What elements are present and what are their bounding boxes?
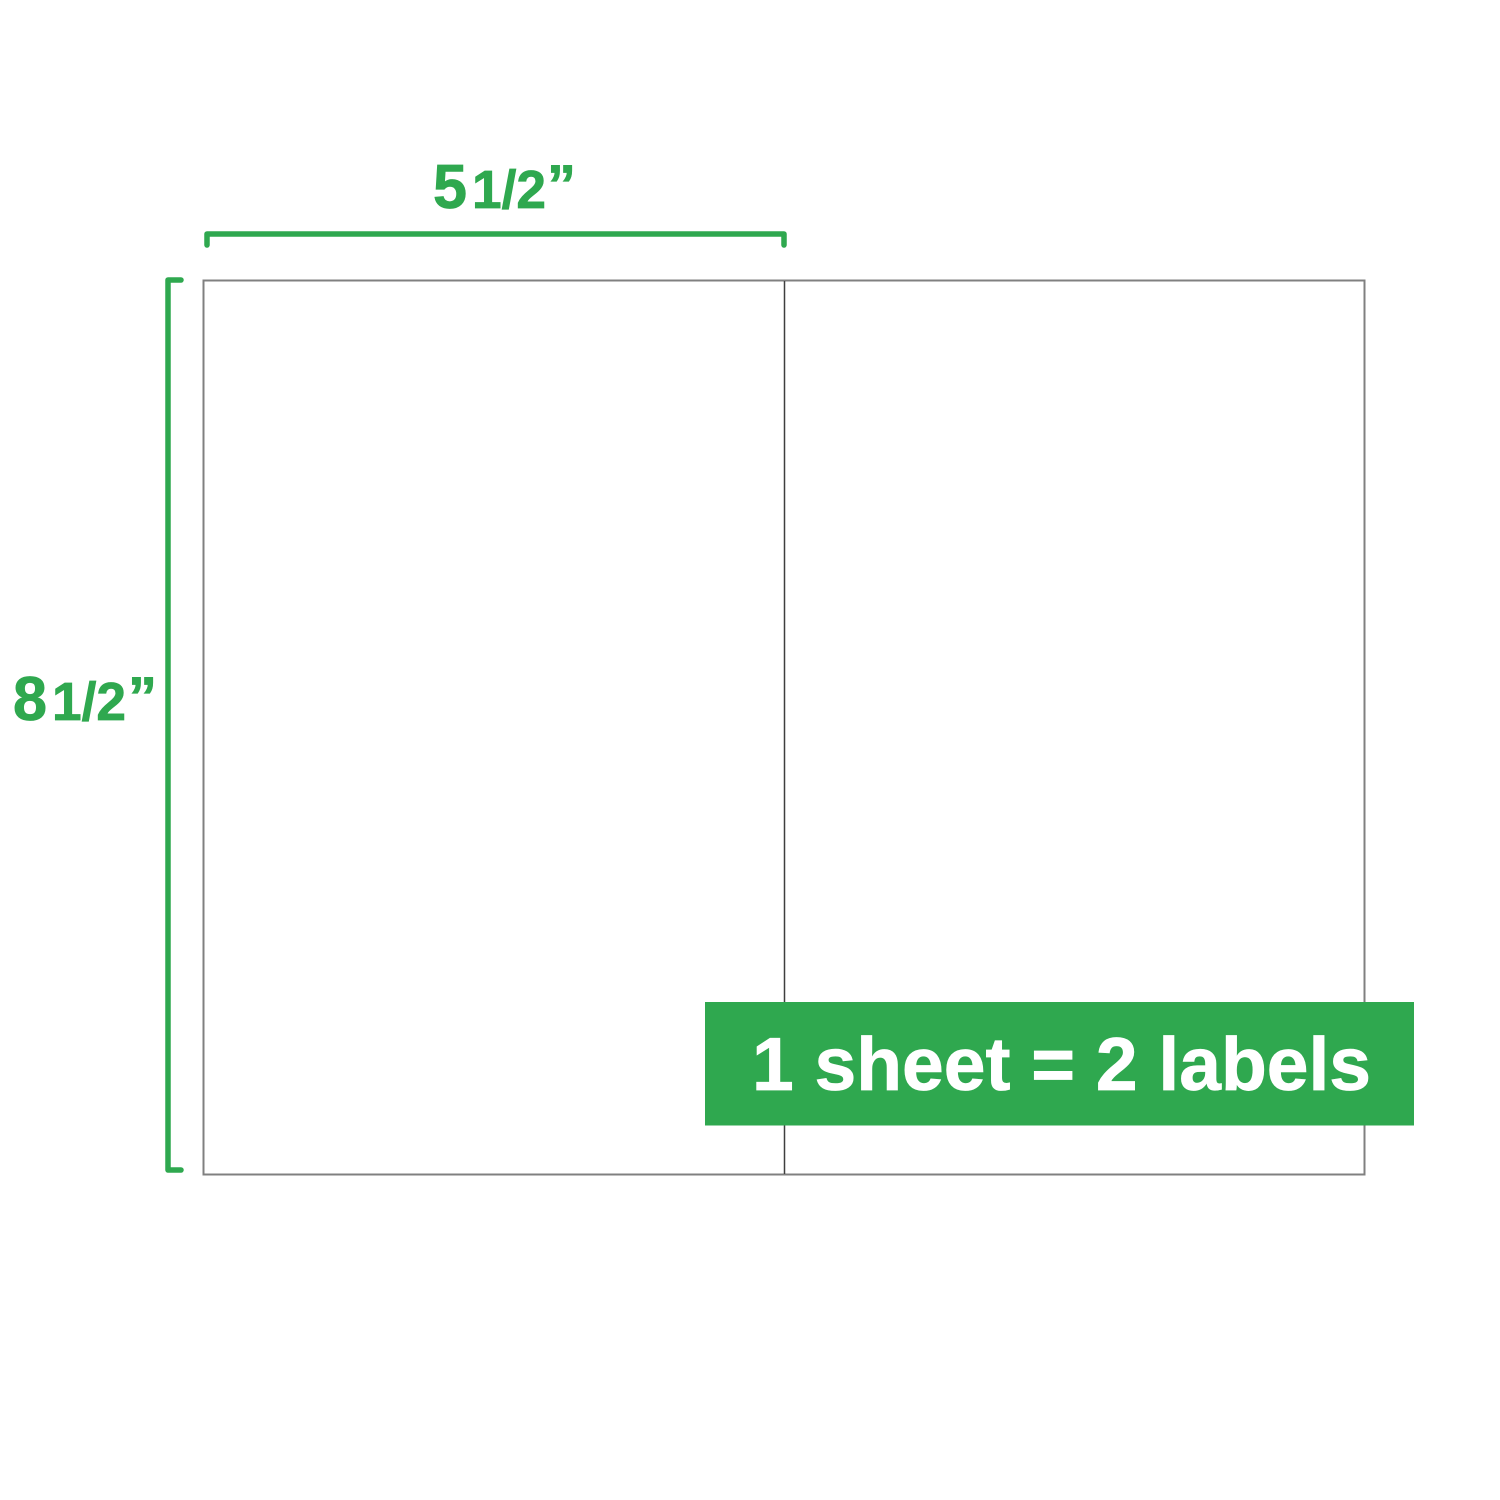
height dimension label: 8 bbox=[13, 665, 47, 734]
width dimension label: 1/2 bbox=[472, 160, 546, 220]
callout banner bbox=[705, 1002, 1414, 1126]
width dimension label: ” bbox=[547, 153, 576, 216]
callout banner: 1 sheet = 2 labels bbox=[752, 1022, 1371, 1106]
width dimension label bbox=[433, 153, 576, 222]
height dimension label bbox=[13, 665, 157, 734]
height dimension label: 1/2 bbox=[52, 672, 126, 732]
height bracket bbox=[168, 280, 181, 1170]
width dimension label: 5 bbox=[433, 153, 467, 222]
divider between the two labels bbox=[784, 281, 786, 1174]
label sheet outline bbox=[204, 280, 1364, 1174]
width bracket bbox=[207, 234, 784, 245]
height dimension label: ” bbox=[128, 665, 157, 728]
